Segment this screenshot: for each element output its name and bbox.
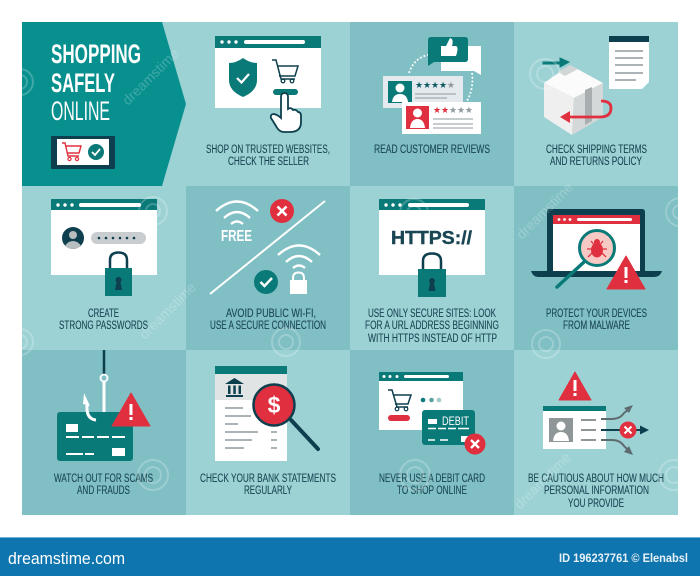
- watermark spirals and marks: dreamstime: [511, 449, 574, 512]
- caption: READ CUSTOMER REVIEWS: [374, 144, 490, 156]
- caption: [54, 473, 153, 497]
- heading: shopping safely online: SAFELY: [51, 68, 115, 98]
- icon: bank statement with magnifier: [215, 366, 318, 461]
- caption: TO SHOP ONLINE: [397, 485, 467, 497]
- caption: [365, 308, 499, 345]
- watermark spirals and marks: [7, 45, 694, 512]
- footer bar: [0, 537, 700, 576]
- heading: shopping safely online: SHOPPING: [51, 39, 141, 69]
- caption: FROM MALWARE: [563, 320, 630, 332]
- caption: USE A SECURE CONNECTION: [210, 320, 326, 332]
- caption: PROTECT YOUR DEVICES: [546, 308, 647, 320]
- caption: [528, 473, 664, 510]
- caption: USE ONLY SECURE SITES: LOOK: [368, 308, 496, 320]
- heading: shopping safely online: ONLINE: [51, 96, 110, 126]
- caption: WATCH OUT FOR SCAMS: [54, 473, 153, 485]
- caption: [379, 473, 485, 497]
- caption: STRONG PASSWORDS: [59, 320, 148, 332]
- caption: NEVER USE A DEBIT CARD: [379, 473, 485, 485]
- panel: strong passwords: [22, 186, 186, 350]
- icon: review cards and speech bubbles: ★★★★★: [433, 106, 473, 116]
- icon: laptop with bug under magnifier and warning: [531, 209, 662, 289]
- caption: REGULARLY: [244, 485, 292, 497]
- panel: debit card: [350, 350, 514, 515]
- caption: AND RETURNS POLICY: [550, 156, 642, 168]
- panel: customer reviews: [350, 22, 514, 186]
- icon: browser with debit card and cross: [379, 372, 486, 454]
- caption: [546, 144, 647, 168]
- panel: scams and frauds: [22, 350, 186, 515]
- caption: WITH HTTPS INSTEAD OF HTTP: [368, 333, 497, 345]
- caption: PERSONAL INFORMATION: [544, 485, 649, 497]
- icon: browser with password field and padlock: [51, 199, 157, 296]
- panel: malware: [514, 186, 678, 350]
- caption: [206, 144, 330, 168]
- caption: CHECK SHIPPING TERMS: [546, 144, 647, 156]
- footer logo: dreamstime.com: [8, 549, 125, 568]
- caption: AVOID PUBLIC WI-FI,: [226, 308, 316, 320]
- panel: trusted websites: [162, 22, 350, 186]
- icon: parcel with arrows: [543, 58, 611, 135]
- icon: browser with debit card and cross: DEBIT: [442, 414, 470, 428]
- icon: review cards and speech bubbles: [383, 37, 481, 134]
- icon: review cards and speech bubbles: ★★★★★: [415, 81, 455, 91]
- watermark spirals and marks: dreamstime: [136, 279, 199, 342]
- icon: browser with shield, cart and hand: [215, 36, 321, 132]
- icon: https browser with padlock: [379, 199, 485, 297]
- caption: [210, 308, 326, 332]
- footer image id: ID 196237761 © Elenabsl: [559, 551, 688, 565]
- panel: personal information: [514, 350, 678, 515]
- icon: free wi-fi versus secure wi-fi: FREE: [221, 228, 252, 245]
- heading: shopping safely online: [51, 39, 141, 126]
- icon: https browser with padlock: HTTPS://: [391, 228, 472, 248]
- icon: shipping document: [609, 36, 649, 89]
- watermark spirals and marks: dreamstime: [513, 179, 576, 242]
- caption: [200, 473, 336, 497]
- caption: FOR A URL ADDRESS BEGINNING: [365, 320, 499, 332]
- caption: [59, 308, 148, 332]
- icon: credit card on fishing hook with warning: [57, 350, 150, 461]
- watermark spirals and marks: dreamstime: [119, 45, 182, 108]
- caption: CHECK YOUR BANK STATEMENTS: [200, 473, 336, 485]
- panel: title header: [22, 22, 186, 186]
- panel: secure sites: [350, 186, 514, 350]
- caption: AND FRAUDS: [77, 485, 130, 497]
- icon: id card with warning and data arrows: [543, 372, 649, 455]
- panel: bank statements: [186, 350, 350, 515]
- icon: bank statement with magnifier: $: [268, 392, 281, 418]
- icon: phone with cart and check: [51, 136, 115, 169]
- panel: shipping terms: [514, 22, 678, 186]
- caption: SHOP ON TRUSTED WEBSITES,: [206, 144, 330, 156]
- panel: public wi-fi: [186, 186, 350, 350]
- caption: CHECK THE SELLER: [228, 156, 309, 168]
- caption: [546, 308, 647, 332]
- caption: CREATE: [88, 308, 119, 320]
- icon: free wi-fi versus secure wi-fi: [210, 199, 325, 294]
- caption: YOU PROVIDE: [568, 498, 624, 510]
